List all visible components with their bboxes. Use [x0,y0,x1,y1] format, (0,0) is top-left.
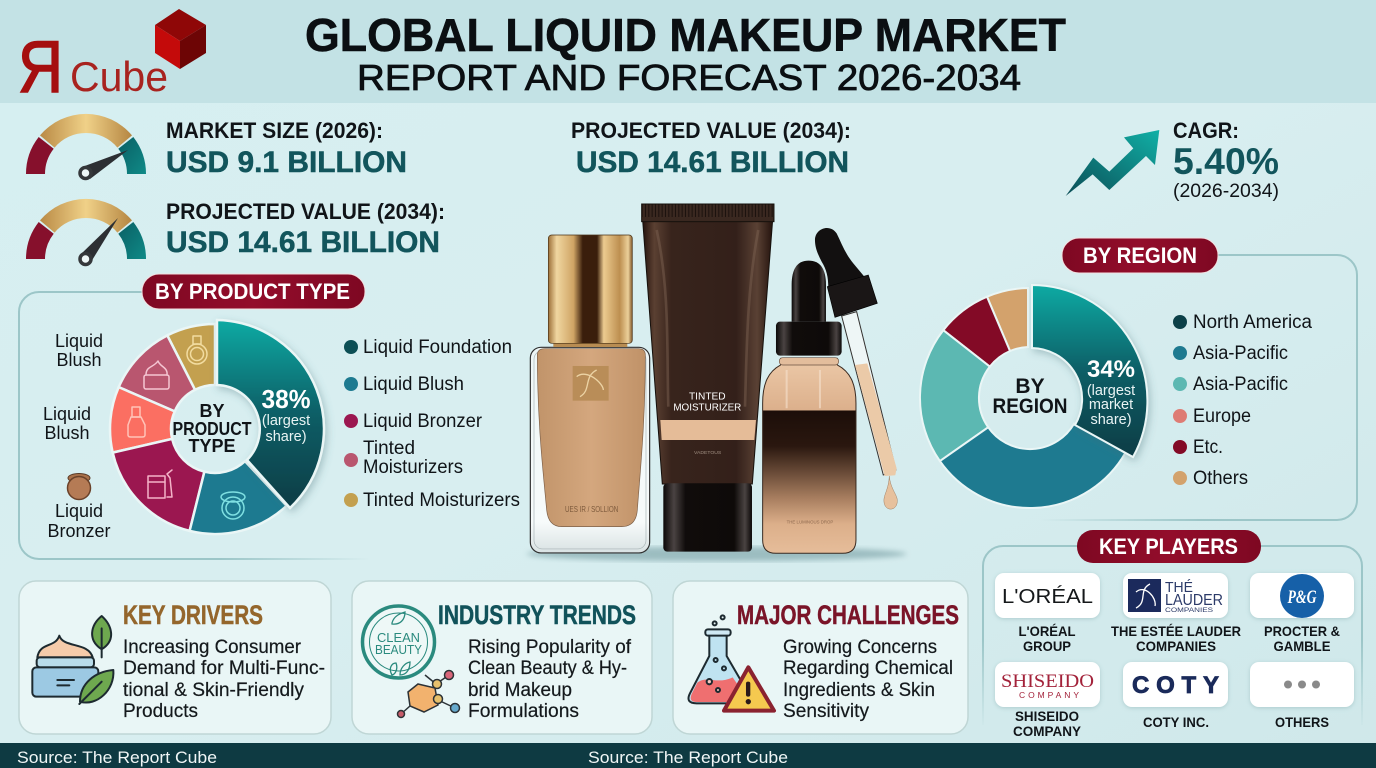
icon: gauge market size [26,114,146,179]
foundation bottle: UES IR / SOLLION [565,504,618,514]
title: GLOBAL LIQUID MAKEUP MARKET [305,9,1066,61]
title: REPORT AND FORECAST 2026-2034 [357,57,1021,98]
legend: region: Others [1193,468,1248,489]
tinted moisturizer tube: MOISTURIZER [673,403,741,414]
logo card: Shiseido [995,662,1100,707]
legend: region: Asia-Pacific [1193,374,1288,395]
company names: COTY INC. [1143,714,1209,730]
callout: 34 percent: (largest [1087,383,1135,399]
icon: bronzer compact [68,474,90,500]
callout: 38 percent: 38% [262,384,310,414]
donut center label: BY [1015,375,1045,398]
stat: projected value left: USD 14.61 BILLION [166,226,440,259]
heading: major challenges: MAJOR CHALLENGES [737,600,959,630]
donut center label: BY [199,401,225,421]
company names: L'ORÉAL [1018,623,1076,639]
slice icons [128,336,245,519]
stat: market size 2026: MARKET SIZE (2026): [166,118,383,143]
heading: key players [1077,530,1261,563]
donut center label: PRODUCT [172,419,252,439]
logo card: Coty [1123,662,1228,707]
donut center label [172,401,252,456]
stat: market size 2026: USD 9.1 BILLION [166,146,407,179]
panel: key players [983,530,1362,739]
logo card: Shiseido: COMPANY [1019,690,1079,700]
icon: growth arrow [1066,130,1159,196]
icon: clean beauty seal: CLEAN [377,631,420,645]
footer bar: Source: The Report Cube [17,748,217,767]
panel: industry trends [352,581,652,734]
stat: projected value left [166,199,445,259]
text: major challenges: Ingredients & Skin [783,680,935,701]
heading: by region [1062,238,1218,273]
text: industry trends: brid Makeup [468,680,572,701]
text: industry trends: Clean Beauty & Hy- [468,658,627,679]
stat: projected value center: PROJECTED VALUE (2034): [571,118,851,143]
logo card: Estee Lauder [1123,573,1228,618]
stat: projected value left: PROJECTED VALUE (2034): [166,199,445,224]
logo: RCube [18,9,206,108]
side labels: Blush [56,350,102,370]
heading: key players: KEY PLAYERS [1099,534,1238,559]
logo wordmark: Cube [70,53,168,100]
text: major challenges: Regarding Chemical [783,658,953,679]
logo card: others [1250,662,1354,707]
donut chart: region [920,285,1147,508]
side labels: Blush [44,423,90,443]
company names: PROCTER & [1264,623,1340,639]
company names: THE ESTÉE LAUDER [1111,623,1241,639]
icon: cream jar [144,361,169,389]
legend: region: Asia-Pacific [1193,343,1288,364]
text: key drivers: tional & Skin-Friendly [123,680,304,701]
stat: projected value center [571,118,851,179]
legend: product type: Liquid Bronzer [363,411,483,432]
text: industry trends: Rising Popularity of [468,637,632,658]
legend: region [1173,312,1312,489]
text: key drivers: Demand for Multi-Func- [123,658,325,679]
icon: perfume bottle [187,336,207,364]
legend: product type: Liquid Blush [363,374,464,395]
heading: by product type [142,274,365,309]
callout: 34 percent: share) [1090,412,1132,428]
logo card: P&G: P&G [1287,587,1317,608]
company names: GROUP [1023,638,1071,654]
icon: compact [221,492,245,519]
logo card: Estee Lauder: COMPANIES [1165,607,1214,614]
panel: major challenges [673,581,968,734]
stat: market size 2026 [166,118,407,179]
donut center label: REGION [992,395,1068,418]
tinted moisturizer tube [642,204,774,552]
legend: region: North America [1193,312,1312,333]
company names: GAMBLE [1274,638,1330,654]
icon: flask and warning [688,615,774,711]
side labels: Bronzer [47,521,111,541]
stat: CAGR: (2026-2034) [1173,181,1279,202]
icon: nail bottle [128,407,145,437]
text: major challenges: Growing Concerns [783,637,937,658]
company names: SHISEIDO [1015,708,1079,724]
logo wordmark: Я [18,27,63,108]
callout: 38 percent [262,384,310,445]
text: key drivers [123,637,325,722]
tinted moisturizer tube: TINTED [689,391,726,402]
logo card: Estee Lauder: LAUDER [1165,592,1223,609]
text: industry trends: Formulations [468,701,579,722]
legend: product type: Tinted Moisturizers [363,490,520,511]
company names [1013,623,1340,739]
tinted moisturizer tube: VADETOUS [694,450,722,456]
icon: box and brush [148,470,172,498]
legend: product type: Tinted [363,438,415,459]
donut center label [992,375,1068,418]
dropper bottle: THE LUMINOUS DROP [787,519,833,524]
logo wordmark [18,27,168,108]
heading: by region: BY REGION [1083,243,1197,268]
footer bar: Source: The Report Cube [588,748,788,767]
panel: key drivers [19,581,331,734]
company names: COMPANY [1013,723,1082,739]
company names: OTHERS [1275,714,1329,730]
logo card: L'Oreal [995,573,1100,618]
stat: CAGR [1173,118,1279,202]
text: major challenges [783,637,953,722]
product illustration [527,204,907,561]
heading: industry trends: INDUSTRY TRENDS [438,600,636,630]
company names: COMPANIES [1136,638,1216,654]
callout: 38 percent: (largest [262,413,310,429]
icon: gauge projected value [26,199,146,264]
side labels: Liquid [55,331,103,351]
foundation bottle [530,235,650,553]
side labels: Liquid [43,404,91,424]
callout: 34 percent [1087,356,1135,428]
icon: cream jar and leaves [32,616,113,704]
panel: by product type [19,274,520,559]
panel: by region [920,238,1357,520]
legend: product type: Liquid Foundation [363,337,512,358]
icon: molecule [398,670,460,718]
stat: CAGR: CAGR: [1173,118,1239,143]
stat: projected value center: USD 14.61 BILLION [576,146,849,179]
donut center label: TYPE [188,436,236,456]
text: key drivers: Increasing Consumer [123,637,302,658]
side labels [43,331,111,541]
callout: 34 percent: market [1089,397,1133,413]
header band [0,0,1376,103]
text: industry trends [468,637,632,722]
stat: CAGR: 5.40% [1173,141,1279,182]
legend: region: Etc. [1193,437,1223,458]
heading: key drivers: KEY DRIVERS [123,600,263,630]
side labels: Liquid [55,501,103,521]
heading: by product type: BY PRODUCT TYPE [155,279,350,304]
legend: product type [344,337,520,511]
text: major challenges: Sensitivity [783,701,869,722]
title [305,9,1066,98]
text: key drivers: Products [123,701,198,722]
legend: product type: Moisturizers [363,457,463,478]
logo card: Shiseido: SHISEIDO [1001,671,1094,692]
icon: clean beauty seal: BEAUTY [375,643,423,657]
callout: 34 percent: 34% [1087,356,1135,383]
logo card: P&G [1250,573,1354,618]
logo card: Estee Lauder: THÉ [1165,579,1193,596]
callout: 38 percent: share) [265,429,307,445]
dropper bottle [763,261,856,553]
logo card: L'Oreal: L'ORÉAL [1002,585,1093,608]
logo cube [155,9,206,69]
logo card: Coty: COTY [1132,672,1219,699]
donut chart: product type [110,320,324,534]
icon: clean beauty seal [362,606,434,678]
pipette [815,228,897,509]
legend: region: Europe [1193,406,1251,427]
footer bar [0,743,1376,768]
